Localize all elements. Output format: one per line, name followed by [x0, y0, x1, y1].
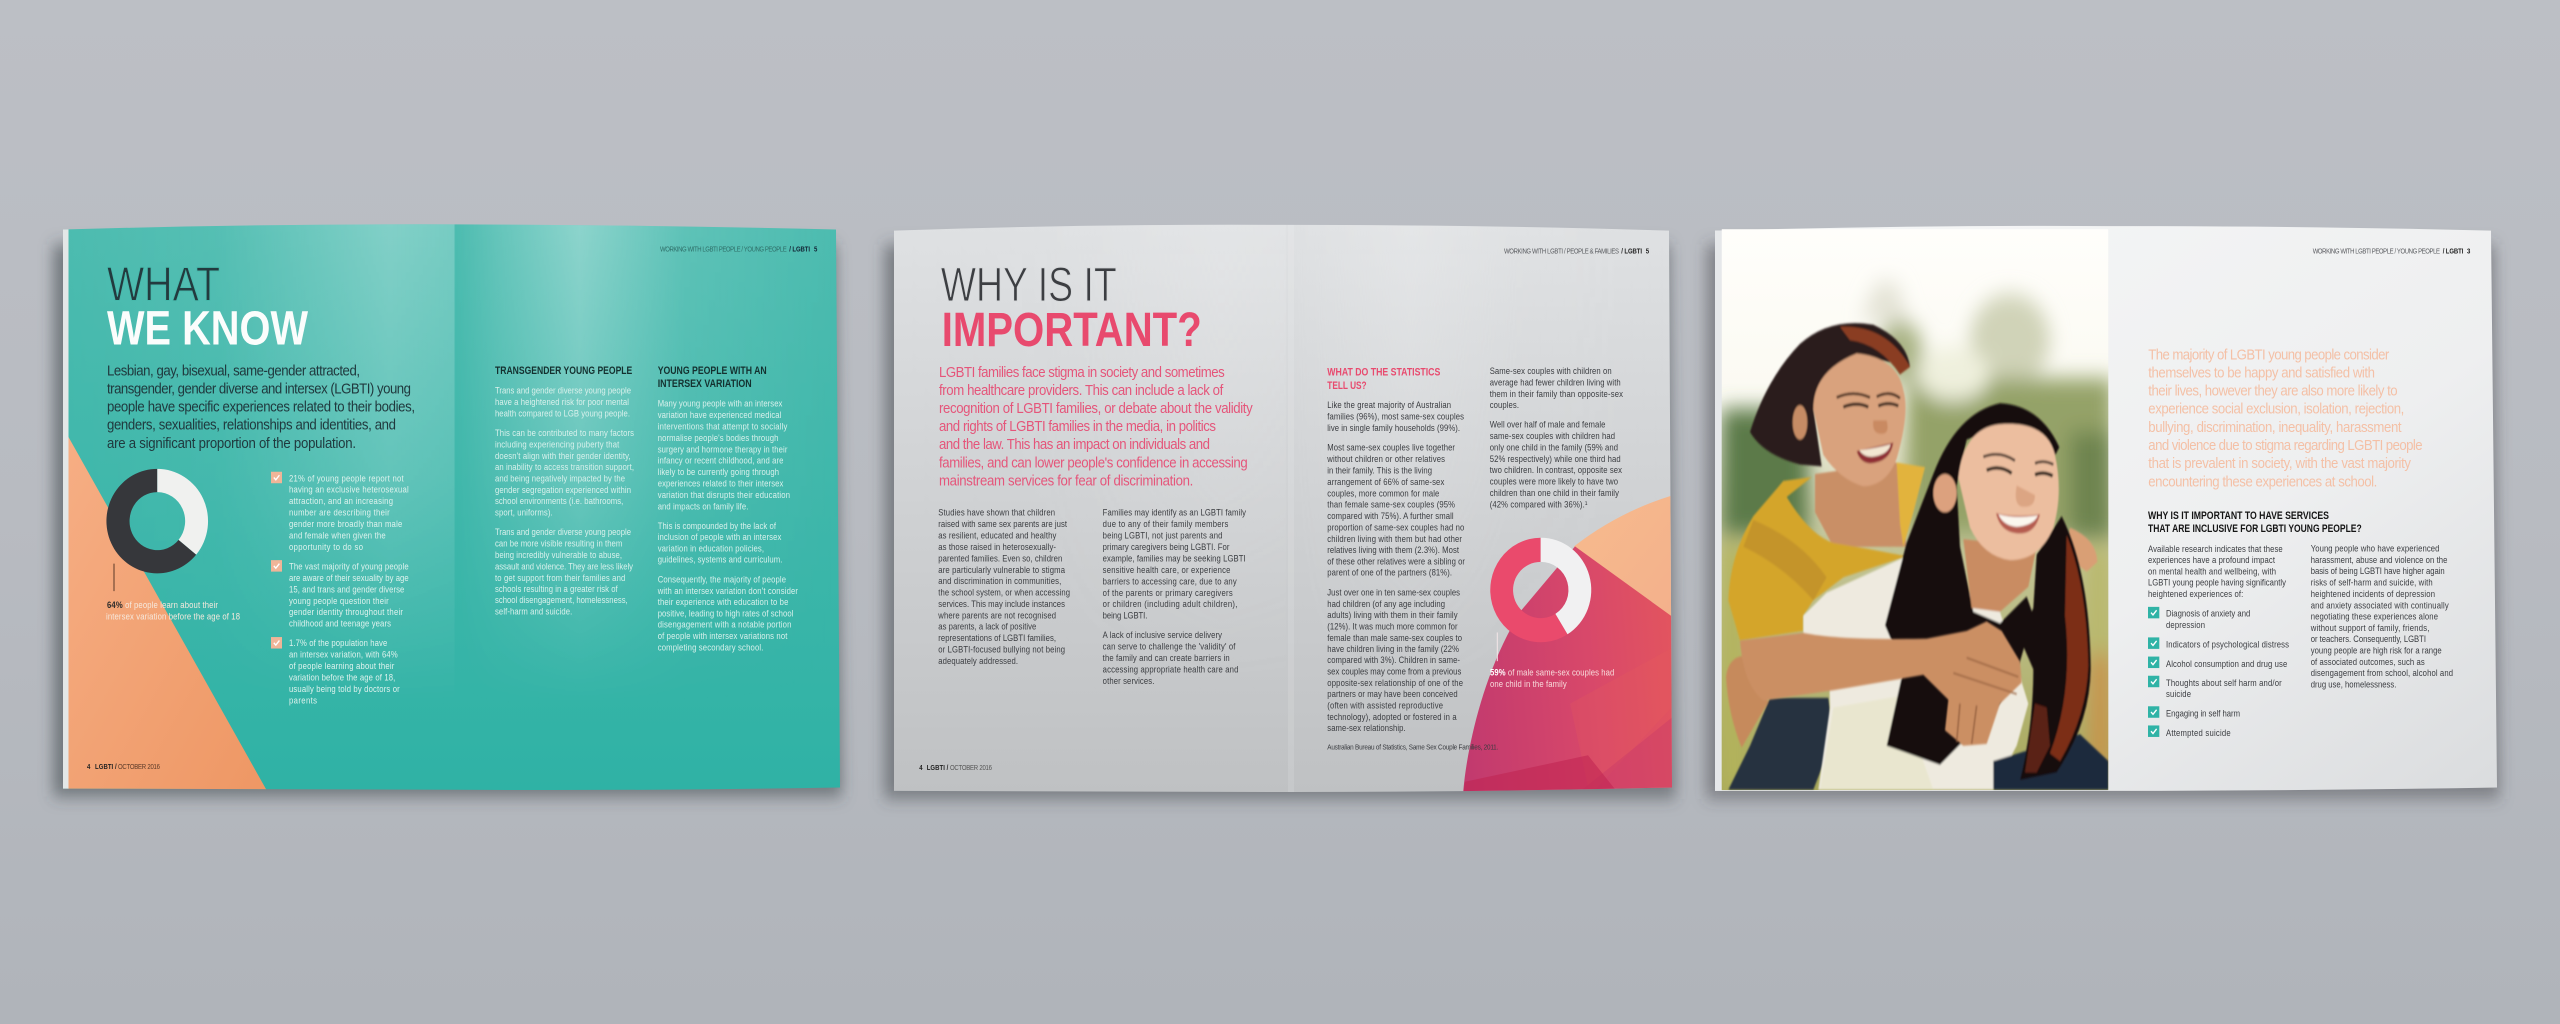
page header: 3 — [2467, 248, 2471, 256]
column: what do the statistics tell us — [1326, 366, 1498, 752]
donut caption: intersex variation before the age of 18 — [106, 612, 240, 622]
column: intersex variation: likely to be currently going through — [658, 468, 779, 477]
intro text: Lesbian, gay, bisexual, same-gender attracted, — [107, 363, 360, 380]
footer: LGBTI / — [95, 764, 117, 771]
item 2: childhood and teenage years — [289, 619, 391, 629]
column: what do the statistics tell us: have children living in the family (22% — [1327, 645, 1460, 654]
column: intersex variation: INTERSEX VARIATION — [658, 378, 752, 390]
body column right: couples were more likely to have two — [1490, 477, 1618, 487]
column: intersex variation: their experience with education to be — [658, 597, 789, 607]
body column 2: basis of being LGBTI have higher again — [2311, 566, 2445, 576]
footer: 4 — [919, 765, 923, 772]
column: transgender young people: This can be contributed to many factors — [495, 428, 634, 438]
page header: / LGBTI — [2443, 248, 2463, 256]
body column 1: on mental health and wellbeing, with — [2148, 567, 2276, 576]
column: intersex variation: disengagement with a notable portion — [658, 620, 792, 630]
footer: 4 — [87, 764, 91, 771]
column: transgender young people: being incredibly vulnerable to abuse, — [495, 550, 622, 560]
checklist: Indicators of psychological distress — [2166, 640, 2289, 650]
column: transgender young people: Trans and gender diverse young people — [495, 386, 631, 395]
intro text: people have specific experiences related to their bodies, — [107, 399, 415, 416]
body column right: average had fewer children living with — [1490, 378, 1621, 387]
checklist: Thoughts about self harm and/or — [2166, 679, 2282, 688]
body column 2: or teachers. Consequently, LGBTI — [2311, 635, 2426, 644]
column: what do the statistics tell us: TELL US? — [1327, 379, 1367, 392]
intro text: encountering these experiences at school. — [2148, 474, 2377, 491]
column: intersex variation: inclusion of people with an intersex — [658, 532, 782, 542]
body column 2: of the parents or primary caregivers — [1103, 589, 1233, 598]
column: what do the statistics tell us: opposite-sex relationship of one of the — [1327, 679, 1463, 688]
column: what do the statistics tell us: parent of one of the partners (81%). — [1327, 568, 1452, 578]
brochure 3: young people — [1715, 224, 2497, 795]
column: transgender young people: to get support from their families and — [495, 573, 626, 583]
column: intersex variation: normalise people's bodies through — [658, 434, 779, 443]
body column 1: as parents, a lack of positive — [938, 622, 1037, 631]
item 1: having an exclusive heterosexual — [289, 485, 409, 495]
body column 2: can serve to challenge the 'validity' of — [1103, 642, 1236, 652]
page header: WORKING WITH LGBTI / PEOPLE & FAMILIES — [1504, 248, 1619, 255]
intro text — [2148, 347, 2423, 491]
column: intersex variation: surgery and hormone therapy in their — [658, 445, 788, 455]
footer: LGBTI / — [927, 765, 948, 772]
checklist: Engaging in self harm — [2166, 709, 2240, 718]
heading: WHAT — [107, 257, 220, 311]
footer — [87, 764, 160, 771]
column: what do the statistics tell us: WHAT DO THE STATISTICS — [1327, 366, 1440, 379]
column: what do the statistics tell us: (12%). It was much more common for — [1327, 622, 1458, 631]
heading: WE KNOW — [107, 301, 308, 355]
item 3: parents — [289, 696, 317, 705]
body column right: same-sex couples with children had — [1490, 431, 1615, 441]
item 3: variation before the age of 18, — [289, 673, 395, 682]
intro text: transgender, gender diverse and intersex (LGBTI) young — [107, 381, 411, 398]
body column right: 52% respectively) while one third had — [1490, 454, 1621, 464]
column: transgender young people: assault and violence. They are less likely — [495, 562, 634, 571]
body column 2: disengagement from school, alcohol and — [2311, 669, 2453, 678]
page header: 5 — [814, 246, 818, 254]
column: transgender young people: school environments (i.e. bathrooms, — [495, 497, 623, 506]
column: intersex variation: guidelines, systems and curriculum. — [658, 555, 782, 565]
body column 1 — [2148, 545, 2287, 599]
footer: OCTOBER 2016 — [118, 764, 160, 771]
page header: WORKING WITH LGBTI PEOPLE / YOUNG PEOPLE — [660, 246, 787, 254]
column: transgender young people: can be more visible resulting in them — [495, 539, 622, 549]
source note: Australian Bureau of Statistics, Same Sex Couple Families, 2011. — [1327, 744, 1498, 752]
intro text — [939, 364, 1254, 490]
column: transgender young people: and being negatively impacted by the — [495, 474, 625, 484]
item 1 — [271, 472, 409, 552]
body column 2: heightened incidents of depression — [2311, 589, 2435, 599]
intro text: families, and can lower people's confidence in accessing — [939, 455, 1248, 472]
intro text: and violence due to stigma regarding LGBTI people — [2148, 437, 2423, 454]
donut caption — [1490, 668, 1615, 689]
body column 2: risks of self-harm and suicide, with — [2311, 578, 2433, 588]
column: what do the statistics tell us: partners or may have been conceived — [1327, 690, 1458, 699]
heading: WHY IS IT — [941, 257, 1117, 312]
item 2: gender identity throughout their — [289, 608, 403, 617]
item 2: young people question their — [289, 596, 389, 606]
intro text: mainstream services for fear of discrimination. — [939, 473, 1193, 490]
column: intersex variation: interventions that attempt to socially — [658, 422, 788, 432]
column: what do the statistics tell us: same-sex relationship. — [1327, 724, 1406, 733]
column: intersex variation: of people with intersex variations not — [658, 632, 788, 641]
item 3 — [271, 637, 400, 705]
intro text: from healthcare providers. This can include a lack of — [939, 382, 1223, 399]
body column 1: parented families. Even so, children — [938, 554, 1063, 563]
body column 2: negotiating these experiences alone — [2311, 612, 2438, 622]
donut caption — [106, 601, 240, 622]
footer — [919, 765, 992, 772]
column: what do the statistics tell us: Most same-sex couples live together — [1327, 443, 1455, 453]
item 2: 15, and trans and gender diverse — [289, 585, 405, 594]
body column right: two children. In contrast, opposite sex — [1490, 465, 1623, 475]
body column 2 — [2310, 544, 2453, 690]
column: intersex variation: variation that disrupts their education — [658, 490, 790, 500]
column: transgender young people: have a heightened risk for poor mental — [495, 397, 629, 407]
neck — [1963, 539, 2037, 612]
column: transgender young people: sport, uniforms). — [495, 508, 553, 518]
intro text: are a significant proportion of the population. — [107, 435, 356, 452]
column: what do the statistics tell us: in their family. This is the living — [1327, 466, 1432, 476]
donut chart 59% — [1490, 538, 1591, 661]
body column 2: and anxiety associated with continually — [2311, 601, 2449, 610]
column: what do the statistics tell us: of these other relatives were a sibling or — [1327, 557, 1465, 567]
body column 2: sensitive health care, or experience — [1103, 566, 1231, 575]
column: transgender young people: gender segregation experienced within — [495, 486, 631, 495]
column: what do the statistics tell us: compared with 3%). Children in same- — [1327, 656, 1460, 665]
body column 2: primary caregivers being LGBTI. For — [1103, 543, 1230, 552]
pink graphic shape — [1463, 546, 1675, 795]
body column 1: raised with same sex parents are just — [938, 519, 1068, 529]
intro text — [107, 363, 415, 452]
item 1: and female when given the — [289, 531, 386, 541]
body column 2: other services. — [1103, 676, 1154, 686]
body column 1: Studies have shown that children — [938, 508, 1055, 518]
body column 2: accessing appropriate health care and — [1103, 665, 1239, 674]
column: intersex variation: variation have experienced medical — [658, 411, 782, 420]
column: what do the statistics tell us: children living with them but had other — [1327, 534, 1462, 544]
column: what do the statistics tell us: arrangement of 66% of same-sex — [1327, 478, 1445, 487]
column: what do the statistics tell us: Like the great majority of Australian — [1327, 401, 1451, 410]
column: what do the statistics tell us: had children (of any age including — [1327, 599, 1445, 609]
intro text: LGBTI families face stigma in society and sometimes — [939, 364, 1225, 381]
body column 2: being LGBTI. — [1103, 611, 1147, 621]
body column 2: or children (including adult children), — [1103, 600, 1237, 609]
body column 2: barriers to accessing care, due to any — [1103, 577, 1237, 587]
column: intersex variation: and impacts on family life. — [658, 502, 748, 511]
column: transgender young people: school disengagement, homelessness, — [495, 595, 628, 605]
column: intersex variation: positive, leading to high rates of school — [658, 609, 794, 619]
column: what do the statistics tell us: without children or other relatives — [1326, 455, 1445, 464]
body column 2: due to any of their family members — [1103, 520, 1228, 529]
orange triangle — [68, 436, 267, 791]
donut caption: 59% of male same-sex couples had — [1490, 668, 1615, 678]
item 1: number are describing their — [289, 508, 390, 518]
column: intersex variation: This is compounded by the lack of — [658, 521, 777, 531]
intro text: themselves to be happy and satisfied with — [2148, 365, 2375, 382]
column: intersex variation: YOUNG PEOPLE WITH AN — [658, 364, 767, 377]
body column 1: Available research indicates that these — [2148, 545, 2283, 554]
column: transgender young people: doesn't align with their gender identity, — [495, 451, 631, 461]
services heading: WHY IS IT IMPORTANT TO HAVE SERVICES — [2148, 510, 2329, 522]
checklist: Diagnosis of anxiety and — [2166, 609, 2251, 619]
intro text: that is prevalent in society, with the vast majority — [2148, 455, 2412, 472]
intro text: recognition of LGBTI families, or debate about the validity — [939, 400, 1254, 417]
column: intersex variation: experiences related to their intersex — [658, 479, 784, 489]
body column 2: A lack of inclusive service delivery — [1103, 631, 1223, 640]
body column right: only one child in the family (59% and — [1490, 443, 1618, 452]
column: transgender young people: health compared to LGB young people. — [495, 409, 630, 418]
column: what do the statistics tell us: adults) living with them in their family — [1327, 610, 1458, 620]
body column right: children than one child in their family — [1490, 488, 1620, 498]
column: intersex variation: completing secondary school. — [658, 643, 763, 653]
column: intersex variation: Consequently, the majority of people — [658, 575, 786, 584]
item 1: 21% of young people report not — [289, 474, 404, 483]
column: what do the statistics tell us: female than male same-sex couples to — [1327, 633, 1462, 643]
body column 1: experiences have a profound impact — [2148, 556, 2276, 565]
body column 2: the family and can create barriers in — [1103, 654, 1230, 663]
face — [1958, 424, 2059, 560]
column: transgender young people: schools resulting in a greater risk of — [495, 584, 618, 594]
intro text: and the law. This has an impact on individuals and — [939, 436, 1210, 453]
intro text: and rights of LGBTI families in the media, in politics — [939, 418, 1216, 435]
item 1: attraction, and an increasing — [289, 497, 393, 506]
intro text: their lives, however they are also more likely to — [2148, 383, 2398, 400]
donut caption: 64% of people learn about their — [107, 601, 218, 610]
back woman — [1726, 323, 2097, 790]
body column 2: Families may identify as an LGBTI family — [1103, 508, 1247, 518]
body column 2: example, families may be seeking LGBTI — [1103, 554, 1246, 564]
item 1: gender more broadly than male — [289, 520, 403, 529]
checklist: Attempted suicide — [2166, 728, 2231, 738]
column: what do the statistics tell us: compared with 75%). A further small — [1327, 511, 1454, 521]
column: what do the statistics tell us: families (96%), most same-sex couples — [1327, 412, 1464, 422]
column: what do the statistics tell us: sex couples may come from a previous — [1327, 667, 1461, 677]
column: transgender young people: Trans and gender diverse young people — [495, 528, 631, 537]
body column right: couples. — [1490, 401, 1519, 410]
body column 1: and discrimination in communities, — [938, 576, 1061, 586]
heading: IMPORTANT? — [942, 302, 1202, 356]
column: what do the statistics tell us: than female same-sex couples (95% — [1327, 500, 1456, 510]
column: what do the statistics tell us: relatives living with them (2.3%). Most — [1327, 545, 1460, 555]
column: transgender young people: including experiencing puberty that — [495, 440, 620, 449]
column: what do the statistics tell us: technology), adopted or fostered in a — [1327, 713, 1457, 722]
page header: / LGBTI — [789, 246, 810, 254]
donut chart 64% — [106, 469, 208, 591]
item 3: of people learning about their — [289, 661, 395, 671]
body column 1 — [937, 508, 1070, 666]
heading — [941, 257, 1202, 356]
column: transgender young people: self-harm and suicide. — [495, 607, 572, 617]
checklist — [2148, 607, 2289, 738]
body column 1: where parents are not recognised — [937, 611, 1056, 620]
intro text: The majority of LGBTI young people consider — [2148, 347, 2390, 364]
page header: 5 — [1646, 248, 1649, 255]
item 2: are aware of their sexuality by age — [289, 573, 409, 583]
item 2 — [271, 560, 409, 629]
body column 1: LGBTI young people having significantly — [2148, 578, 2287, 588]
page header: WORKING WITH LGBTI PEOPLE / YOUNG PEOPLE — [2313, 248, 2441, 256]
front woman features — [1983, 454, 2053, 464]
body column 2: without support of family, friends, — [2310, 624, 2429, 633]
body column 1: the school system, or when accessing — [938, 588, 1070, 598]
column: transgender young people: an inability to access transition support, — [495, 463, 634, 472]
column: intersex variation: variation in education policies, — [658, 544, 764, 553]
front woman — [1803, 403, 2108, 790]
checklist: Alcohol consumption and drug use — [2166, 659, 2288, 669]
body column 1: heightened experiences of: — [2148, 589, 2243, 599]
column: transgender young people — [495, 364, 634, 617]
item 2: The vast majority of young people — [289, 562, 409, 571]
checklist: suicide — [2166, 690, 2191, 699]
peach graphic shape — [1574, 495, 1675, 623]
column: what do the statistics tell us: couples, more common for male — [1327, 489, 1440, 499]
column: intersex variation: Many young people with an intersex — [658, 399, 783, 409]
services heading — [2148, 510, 2362, 535]
body column right: Same-sex couples with children on — [1490, 366, 1612, 376]
column: intersex variation — [657, 364, 798, 653]
body column 2: drug use, homelessness. — [2311, 680, 2396, 690]
intro text: bullying, discrimination, inequality, harassment — [2148, 419, 2402, 436]
column: what do the statistics tell us: live in single family households (99%). — [1327, 424, 1460, 433]
item 3: 1.7% of the population have — [289, 638, 388, 648]
page header: / LGBTI — [1621, 248, 1642, 255]
checklist: depression — [2166, 620, 2205, 630]
column: intersex variation: infancy or recent childhood, and are — [658, 456, 784, 466]
blurred park background — [1722, 283, 2113, 795]
body column 2: Young people who have experienced — [2311, 544, 2440, 553]
column: what do the statistics tell us: proportion of same-sex couples had no — [1327, 523, 1465, 532]
body column 2: of associated outcomes, such as — [2311, 657, 2425, 667]
item 3: usually being told by doctors or — [289, 684, 400, 694]
photo: two smiling women — [1722, 229, 2113, 795]
body column 1: or LGBTI-focused bullying not being — [938, 645, 1065, 654]
back woman features — [1837, 394, 1900, 398]
intro text: genders, sexualities, relationships and identities, and — [107, 417, 396, 434]
footer: OCTOBER 2016 — [950, 765, 992, 772]
body column 1: are particularly vulnerable to stigma — [938, 565, 1065, 575]
all brochures — [53, 224, 2500, 799]
body column right: them in their family than opposite-sex — [1490, 389, 1624, 399]
body column right: (42% compared with 36%).¹ — [1490, 500, 1588, 509]
long dark hair — [1885, 403, 2059, 765]
heading — [107, 257, 308, 355]
body column 1: services. This may include instances — [938, 599, 1065, 609]
item 1: opportunity to do so — [289, 543, 363, 552]
donut caption: one child in the family — [1490, 680, 1567, 689]
item 3: an intersex variation, with 64% — [289, 650, 398, 660]
services heading: THAT ARE INCLUSIVE FOR LGBTI YOUNG PEOPLE? — [2148, 523, 2362, 535]
body column right: Well over half of male and female — [1490, 420, 1606, 429]
column: transgender young people: TRANSGENDER YOUNG PEOPLE — [495, 364, 632, 377]
column: intersex variation: with an intersex variation don't consider — [657, 586, 798, 596]
brochure 2: why is it important — [894, 224, 1675, 795]
yellow shirt — [1728, 477, 1907, 640]
intro text: experience social exclusion, isolation, rejection, — [2148, 401, 2404, 418]
pink facets — [1464, 718, 1672, 792]
body column 1: adequately addressed. — [938, 656, 1018, 666]
body column right — [1490, 366, 1624, 509]
body column 2: young people are high risk for a range — [2311, 646, 2442, 656]
brochure shadows — [53, 244, 2500, 799]
column: what do the statistics tell us: (often with assisted reproductive — [1327, 701, 1443, 711]
embracing arm and hand — [1740, 621, 2022, 746]
column: what do the statistics tell us: Just over one in ten same-sex couples — [1327, 588, 1460, 598]
brochure 1: what we know — [63, 224, 840, 792]
body column 1: as those raised in heterosexually- — [938, 542, 1056, 552]
checklist — [271, 472, 409, 705]
body column 2 — [1103, 508, 1247, 686]
body column 2: harassment, abuse and violence on the — [2311, 555, 2448, 565]
body column 1: representations of LGBTI families, — [938, 633, 1056, 643]
body column 2: being LGBTI, not just parents and — [1103, 531, 1223, 541]
body column 1: as resilient, educated and healthy — [938, 531, 1057, 540]
